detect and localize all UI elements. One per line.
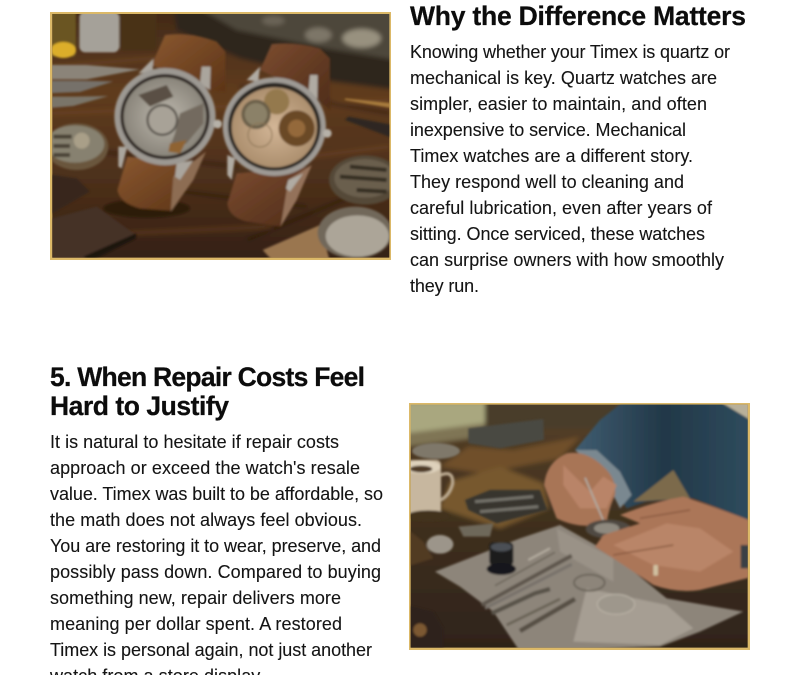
text block: repair value: approach or exceed the watch's resale: [50, 458, 360, 478]
text block: quartz versus mechanical: Timex watches are a different story.: [410, 146, 693, 166]
watch left: [427, 535, 453, 554]
text block: repair value: You are restoring it to wear, preserve, and: [50, 536, 381, 556]
wood grain: [52, 57, 390, 233]
text block: repair value: It is natural to hesitate if repair costs: [50, 432, 339, 452]
text block: repair value: meaning per dollar spent. A restored: [50, 614, 342, 634]
lower hand: [595, 497, 753, 591]
heading: When Repair Costs Feel Hard to Justify: 5. When Repair Costs Feel: [50, 362, 365, 392]
text block: quartz versus mechanical: sitting. Once serviced, these watches: [410, 224, 705, 244]
tools: [495, 552, 555, 586]
loupe: [489, 542, 513, 566]
text block: quartz versus mechanical: inexpensive to service. Mechanical: [410, 120, 686, 140]
text block: quartz versus mechanical: mechanical is key. Quartz watches are: [410, 68, 717, 88]
text block: repair value: possibly pass down. Compared to buying: [50, 562, 381, 582]
photo: watchmaker's hands repairing a watch: [409, 403, 750, 650]
paper: [263, 225, 330, 262]
tools left: [47, 65, 140, 79]
shirt: [575, 402, 753, 522]
disc left: [45, 123, 108, 170]
text block: quartz versus mechanical: they run.: [410, 276, 479, 296]
watch 2: [223, 43, 332, 227]
text block: quartz versus mechanical: [410, 42, 730, 296]
text block: quartz versus mechanical: simpler, easier to maintain, and often: [410, 94, 707, 114]
case back: [318, 207, 392, 259]
window: [407, 402, 485, 433]
text block: repair value: something new, repair delivers more: [50, 588, 341, 608]
tray with parts: [174, 14, 390, 91]
watch being repaired: [586, 520, 631, 538]
heading: When Repair Costs Feel Hard to Justify: Hard to Justify: [50, 391, 229, 421]
table lit area: [440, 467, 548, 528]
tool in hand: [583, 476, 605, 521]
photo: two vintage watches on a workbench: [50, 12, 391, 260]
text block: quartz versus mechanical: careful lubrication, even after years of: [410, 198, 713, 218]
text block: repair value: Timex is personal again, not just another: [50, 640, 372, 660]
cloth: [435, 525, 743, 652]
disc right: [328, 155, 390, 206]
text block: repair value: [49, 432, 383, 675]
jars: [52, 14, 77, 58]
text block: repair value: value. Timex was built to be affordable, so: [50, 484, 383, 504]
rings: [574, 575, 605, 591]
bracelet: [412, 443, 460, 459]
box on shelf: [468, 419, 544, 448]
text block: quartz versus mechanical: Knowing whether your Timex is quartz or: [410, 42, 730, 62]
leather pieces: [47, 174, 90, 217]
upper hand: [544, 453, 615, 526]
text block: repair value: the math does not always feel obvious.: [50, 510, 362, 530]
mug: [407, 460, 441, 515]
parts tray: [465, 490, 547, 523]
heading: Why the Difference Matters: Why the Difference Matters: [410, 1, 746, 31]
tools right: [345, 98, 393, 108]
text block: quartz versus mechanical: They respond well to cleaning and: [410, 172, 684, 192]
shelf: [440, 437, 580, 473]
text block: quartz versus mechanical: can surprise owners with how smoothly: [410, 250, 724, 270]
watch 1: [103, 34, 225, 218]
heading: When Repair Costs Feel Hard to Justify: [50, 362, 365, 421]
